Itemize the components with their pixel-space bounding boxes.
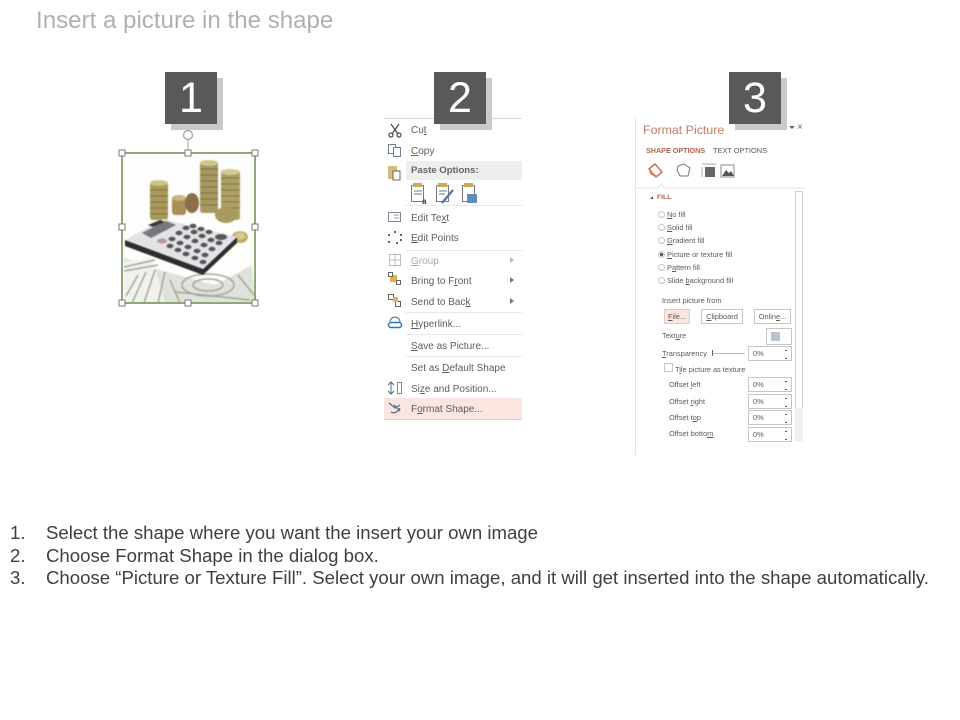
number badge 2	[434, 72, 486, 124]
panel: step 2 context menu: Cut	[411, 125, 427, 136]
panel: step 3 format picture pane: FILL	[657, 194, 671, 201]
panel: step 3 format picture pane: 0%	[753, 380, 764, 389]
panel: step 3 format picture pane: Offset top	[669, 413, 701, 422]
panel: step 3 format picture pane: Format Picture	[643, 123, 724, 137]
panel: step 3 format picture pane: SHAPE OPTIONS	[646, 146, 705, 155]
selection handles	[119, 150, 258, 306]
panel: step 2 context menu: Send to Back	[411, 297, 470, 308]
panel: step 2 context menu: Save as Picture...	[411, 341, 489, 352]
panel: step 3 format picture pane: 0%	[753, 397, 764, 406]
panel: step 3 format picture pane: 0%	[753, 430, 764, 439]
panel: step 3 format picture pane: Offset right	[669, 397, 705, 406]
panel: step 3 format picture pane: 0%	[753, 349, 764, 358]
icon: rotate handle	[184, 130, 192, 152]
panel: step 1 selected picture shape	[118, 130, 258, 306]
instructions list: Choose “Picture or Texture Fill”. Select your own image, and it will get inserted into the shape automatically.	[46, 567, 929, 588]
panel: step 2 context menu: Group	[411, 256, 439, 267]
instructions list: 1.	[10, 522, 26, 543]
calculator body	[125, 219, 237, 275]
panel: step 3 format picture pane: No fill	[667, 210, 686, 219]
panel: step 3 format picture pane: ×	[797, 122, 803, 133]
coins	[150, 160, 248, 243]
panel: step 3 format picture pane: Tile picture as texture	[675, 365, 745, 374]
panel: step 2 context menu: Edit Points	[411, 233, 459, 244]
number badge 2: 2	[448, 74, 472, 122]
panel: step 2 context menu: Paste Options:	[411, 165, 479, 176]
panel: step 3 format picture pane: TEXT OPTIONS	[713, 146, 767, 155]
instructions list: Select the shape where you want the insert your own image	[46, 522, 538, 543]
panel: step 3 format picture pane: Pattern fill	[667, 263, 700, 272]
number badge 3	[729, 72, 781, 124]
panel: step 3 format picture pane	[635, 116, 804, 455]
instructions list: 3.	[10, 567, 26, 588]
number badge 1: 1	[179, 74, 203, 122]
instructions list: 2.	[10, 545, 26, 566]
panel: step 3 format picture pane: File...	[668, 312, 686, 321]
panel: step 2 context menu	[384, 118, 522, 420]
panel: step 3 format picture pane: Picture or texture fill	[667, 250, 732, 259]
insert picture controls: Insert picture from	[662, 296, 722, 305]
menu icons: a	[422, 197, 427, 206]
panel: step 3 format picture pane: Solid fill	[667, 223, 692, 232]
panel: step 3 format picture pane: Online...	[759, 312, 786, 321]
title: Insert a picture in the shape	[36, 7, 333, 34]
panel: step 2 context menu: Bring to Front	[411, 276, 472, 287]
panel: step 2 context menu: Edit Text	[411, 213, 449, 224]
panel: step 3 format picture pane: 0%	[753, 413, 764, 422]
panel: step 2 context menu: Size and Position...	[411, 384, 497, 395]
panel: step 3 format picture pane: Texture	[662, 331, 686, 340]
fill options	[658, 211, 665, 218]
panel: step 2 context menu: Copy	[411, 146, 434, 157]
panel: step 3 format picture pane: Offset bottom	[669, 429, 713, 438]
banknotes	[124, 258, 255, 303]
number badge 3: 3	[743, 74, 767, 122]
shape outline	[122, 153, 255, 303]
panel: step 3 format picture pane: Offset left	[669, 380, 701, 389]
panel: step 3 format picture pane: Transparency	[662, 349, 707, 358]
panel: step 3 format picture pane: Gradient fill	[667, 236, 704, 245]
panel: step 3 format picture pane: Clipboard	[706, 312, 738, 321]
menu icons	[388, 124, 477, 414]
panel: step 2 context menu: Hyperlink...	[411, 319, 461, 330]
scrollbar	[795, 191, 803, 442]
panel: step 3 format picture pane: Slide background fill	[667, 276, 733, 285]
instructions list: Choose Format Shape in the dialog box.	[46, 545, 379, 566]
panel: step 2 context menu: Set as Default Shape	[411, 363, 506, 374]
panel: step 2 context menu: Format Shape...	[411, 404, 483, 415]
number badge 1	[165, 72, 217, 124]
pane icons	[636, 163, 805, 188]
instructions list	[10, 522, 929, 588]
image: calculator and coins	[122, 153, 255, 303]
